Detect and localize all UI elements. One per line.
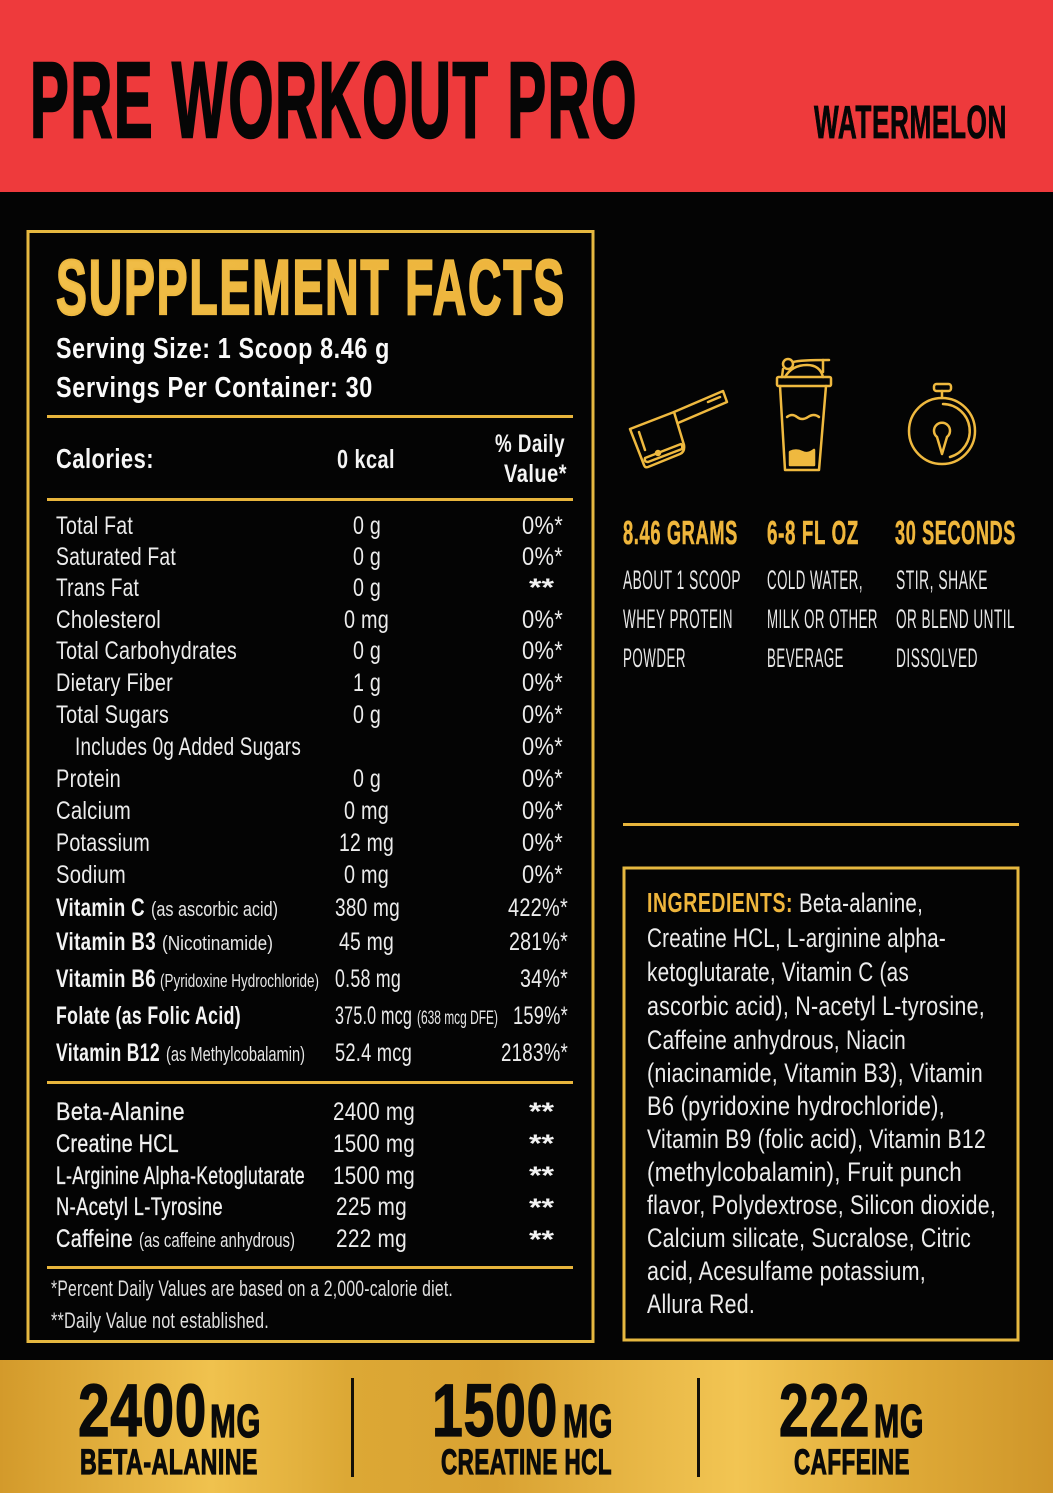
active ingredient rows: ** [529, 1130, 554, 1158]
vitamin rows: Folate (as Folic Acid) [56, 1002, 241, 1030]
active ingredient rows: ** [529, 1162, 554, 1190]
nutrient rows: 0 g [353, 512, 381, 540]
nutrient rows: 0%* [522, 669, 563, 697]
active ingredient rows: 225 mg [336, 1193, 407, 1221]
vitamin rows: Vitamin B12 [56, 1039, 160, 1067]
icon: stopwatch [909, 384, 975, 464]
nutrient rows: Total Sugars [56, 701, 169, 729]
panel: supplement facts [28, 232, 593, 1342]
vitamin rows: (as Methylcobalamin) [166, 1044, 305, 1066]
nutrient rows: 0 g [353, 574, 381, 602]
nutrient rows: Total Carbohydrates [56, 637, 237, 665]
step: liquid amount: BEVERAGE [767, 643, 844, 673]
ingredients list: acid, Acesulfame potassium, [647, 1256, 926, 1286]
stat: caffeine: 222 [779, 1369, 870, 1452]
ingredients list: Calcium silicate, Sucralose, Citric [647, 1223, 971, 1253]
heading: supplement facts: SUPPLEMENT FACTS [56, 243, 566, 331]
nutrient rows: 0%* [522, 829, 563, 857]
active ingredient rows: (as caffeine anhydrous) [139, 1230, 295, 1252]
vitamin rows: 375.0 mcg [335, 1002, 412, 1030]
step: liquid amount [767, 514, 878, 673]
vitamin rows: 380 mg [335, 894, 400, 922]
nutrient rows: 0%* [522, 606, 563, 634]
nutrient rows: 0 g [353, 765, 381, 793]
footer band [0, 1360, 1053, 1493]
nutrient rows: 0 g [353, 637, 381, 665]
nutrient rows: 0%* [522, 543, 563, 571]
vitamin rows: 45 mg [339, 928, 394, 956]
active ingredient rows: N-Acetyl L-Tyrosine [56, 1193, 223, 1221]
nutrient rows: 0 g [353, 701, 381, 729]
nutrient rows [56, 512, 563, 889]
vitamin rows: (Nicotinamide) [162, 933, 273, 955]
vitamin rows [56, 894, 568, 1067]
nutrient rows: 0%* [522, 765, 563, 793]
nutrient rows: 0 mg [344, 861, 389, 889]
stat: creatine hcl: CREATINE HCL [441, 1443, 612, 1482]
step: mixing time: DISSOLVED [896, 643, 978, 673]
step: scoop amount: 8.46 GRAMS [623, 514, 738, 551]
vitamin rows: (Pyridoxine Hydrochloride) [160, 971, 319, 991]
nutrient rows: Potassium [56, 829, 150, 857]
ingredients label: INGREDIENTS: [647, 887, 793, 918]
ingredients list: ketoglutarate, Vitamin C (as [647, 957, 909, 987]
active ingredient rows: L-Arginine Alpha-Ketoglutarate [56, 1162, 305, 1190]
serving info: Servings Per Container: 30 [56, 372, 373, 404]
nutrient rows: Sodium [56, 861, 126, 889]
nutrient rows: Cholesterol [56, 606, 161, 634]
calories row: Value* [504, 460, 567, 488]
nutrient rows: 0%* [522, 701, 563, 729]
ingredients list: Allura Red. [647, 1289, 755, 1319]
active ingredient rows: ** [529, 1098, 554, 1126]
vitamin rows: 2183%* [501, 1039, 568, 1067]
nutrient rows: 0 mg [344, 797, 389, 825]
vitamin rows: Vitamin C [56, 894, 145, 922]
step: scoop amount: POWDER [623, 643, 686, 673]
ingredients list: Beta-alanine, [799, 888, 923, 918]
calories row [56, 430, 567, 488]
nutrient rows: Total Fat [56, 512, 133, 540]
nutrient rows: 0 g [353, 543, 381, 571]
vitamin rows: (as ascorbic acid) [151, 899, 278, 921]
icon: scoop [630, 391, 727, 467]
nutrient rows: Includes 0g Added Sugars [75, 733, 301, 761]
footnotes: **Daily Value not established. [51, 1308, 269, 1333]
nutrient rows: Protein [56, 765, 121, 793]
calories row: Calories: [56, 443, 154, 474]
step: scoop amount: ABOUT 1 SCOOP [623, 565, 741, 595]
vitamin rows: 52.4 mcg [335, 1039, 412, 1067]
active ingredient rows: 1500 mg [333, 1162, 415, 1190]
serving info [56, 333, 390, 404]
text: MILK OR OTHER [767, 604, 878, 634]
stat: beta-alanine: 2400 [78, 1369, 207, 1452]
stat: creatine hcl: 1500 [432, 1369, 558, 1452]
nutrient rows: ** [529, 574, 554, 602]
active ingredient rows: ** [529, 1194, 554, 1222]
nutrient rows: 0%* [522, 733, 563, 761]
footnotes [51, 1276, 453, 1333]
serving info: Serving Size: 1 Scoop 8.46 g [56, 333, 390, 365]
vitamin rows: 0.58 mg [335, 965, 401, 993]
nutrient rows: 1 g [353, 669, 381, 697]
step: scoop amount: WHEY PROTEIN [623, 604, 733, 634]
stat: creatine hcl [432, 1369, 613, 1482]
stat: beta-alanine: MG [210, 1395, 261, 1447]
vitamin rows: Vitamin B3 [56, 928, 156, 956]
active ingredient rows: Beta-Alanine [56, 1098, 185, 1126]
vitamin rows: 34%* [520, 965, 568, 993]
header band [0, 0, 1053, 192]
active ingredient rows: 1500 mg [333, 1130, 415, 1158]
calories row: % Daily [495, 430, 565, 458]
active ingredient rows [56, 1098, 554, 1254]
step: mixing time [895, 514, 1016, 673]
step: liquid amount: 6-8 FL OZ [767, 514, 859, 551]
nutrient rows: 0%* [522, 861, 563, 889]
footnotes: *Percent Daily Values are based on a 2,000-calorie diet. [51, 1276, 453, 1301]
ingredients list [647, 888, 996, 1319]
nutrient rows: 12 mg [339, 829, 394, 857]
active ingredient rows: Creatine HCL [56, 1130, 179, 1158]
stat: beta-alanine [78, 1369, 261, 1482]
active ingredient rows: 2400 mg [333, 1098, 415, 1126]
calories row: 0 kcal [337, 444, 395, 474]
nutrient rows: Saturated Fat [56, 543, 176, 571]
stat: creatine hcl: MG [563, 1395, 613, 1447]
ingredients list: Creatine HCL, L-arginine alpha- [647, 923, 946, 953]
vitamin rows: 422%* [508, 894, 568, 922]
stat: caffeine: MG [874, 1395, 924, 1447]
active ingredient rows: Caffeine [56, 1225, 133, 1253]
ingredients list: Caffeine anhydrous, Niacin [647, 1025, 906, 1055]
ingredients list: B6 (pyridoxine hydrochloride), [647, 1091, 945, 1121]
panel: ingredients [624, 868, 1018, 1340]
nutrient rows: Dietary Fiber [56, 669, 173, 697]
vitamin rows: (638 mcg DFE) [417, 1008, 498, 1029]
stat: caffeine [779, 1369, 924, 1482]
nutrient rows: 0 mg [344, 606, 389, 634]
active ingredient rows: 222 mg [336, 1225, 407, 1253]
stat: caffeine: CAFFEINE [794, 1443, 910, 1482]
nutrient rows: Trans Fat [56, 574, 139, 602]
nutrient rows: Calcium [56, 797, 131, 825]
step: liquid amount: COLD WATER, [767, 565, 863, 595]
icon: shaker bottle [777, 359, 831, 470]
active ingredient rows: ** [529, 1226, 554, 1254]
nutrient rows: 0%* [522, 797, 563, 825]
stat: beta-alanine: BETA-ALANINE [80, 1443, 258, 1482]
step: scoop amount [623, 514, 741, 673]
vitamin rows: 159%* [513, 1002, 568, 1030]
nutrient rows: 0%* [522, 637, 563, 665]
vitamin rows: Vitamin B6 [56, 965, 156, 993]
vitamin rows: 281%* [509, 928, 568, 956]
ingredients list: (methylcobalamin), Fruit punch [647, 1157, 962, 1187]
nutrient rows: 0%* [522, 512, 563, 540]
